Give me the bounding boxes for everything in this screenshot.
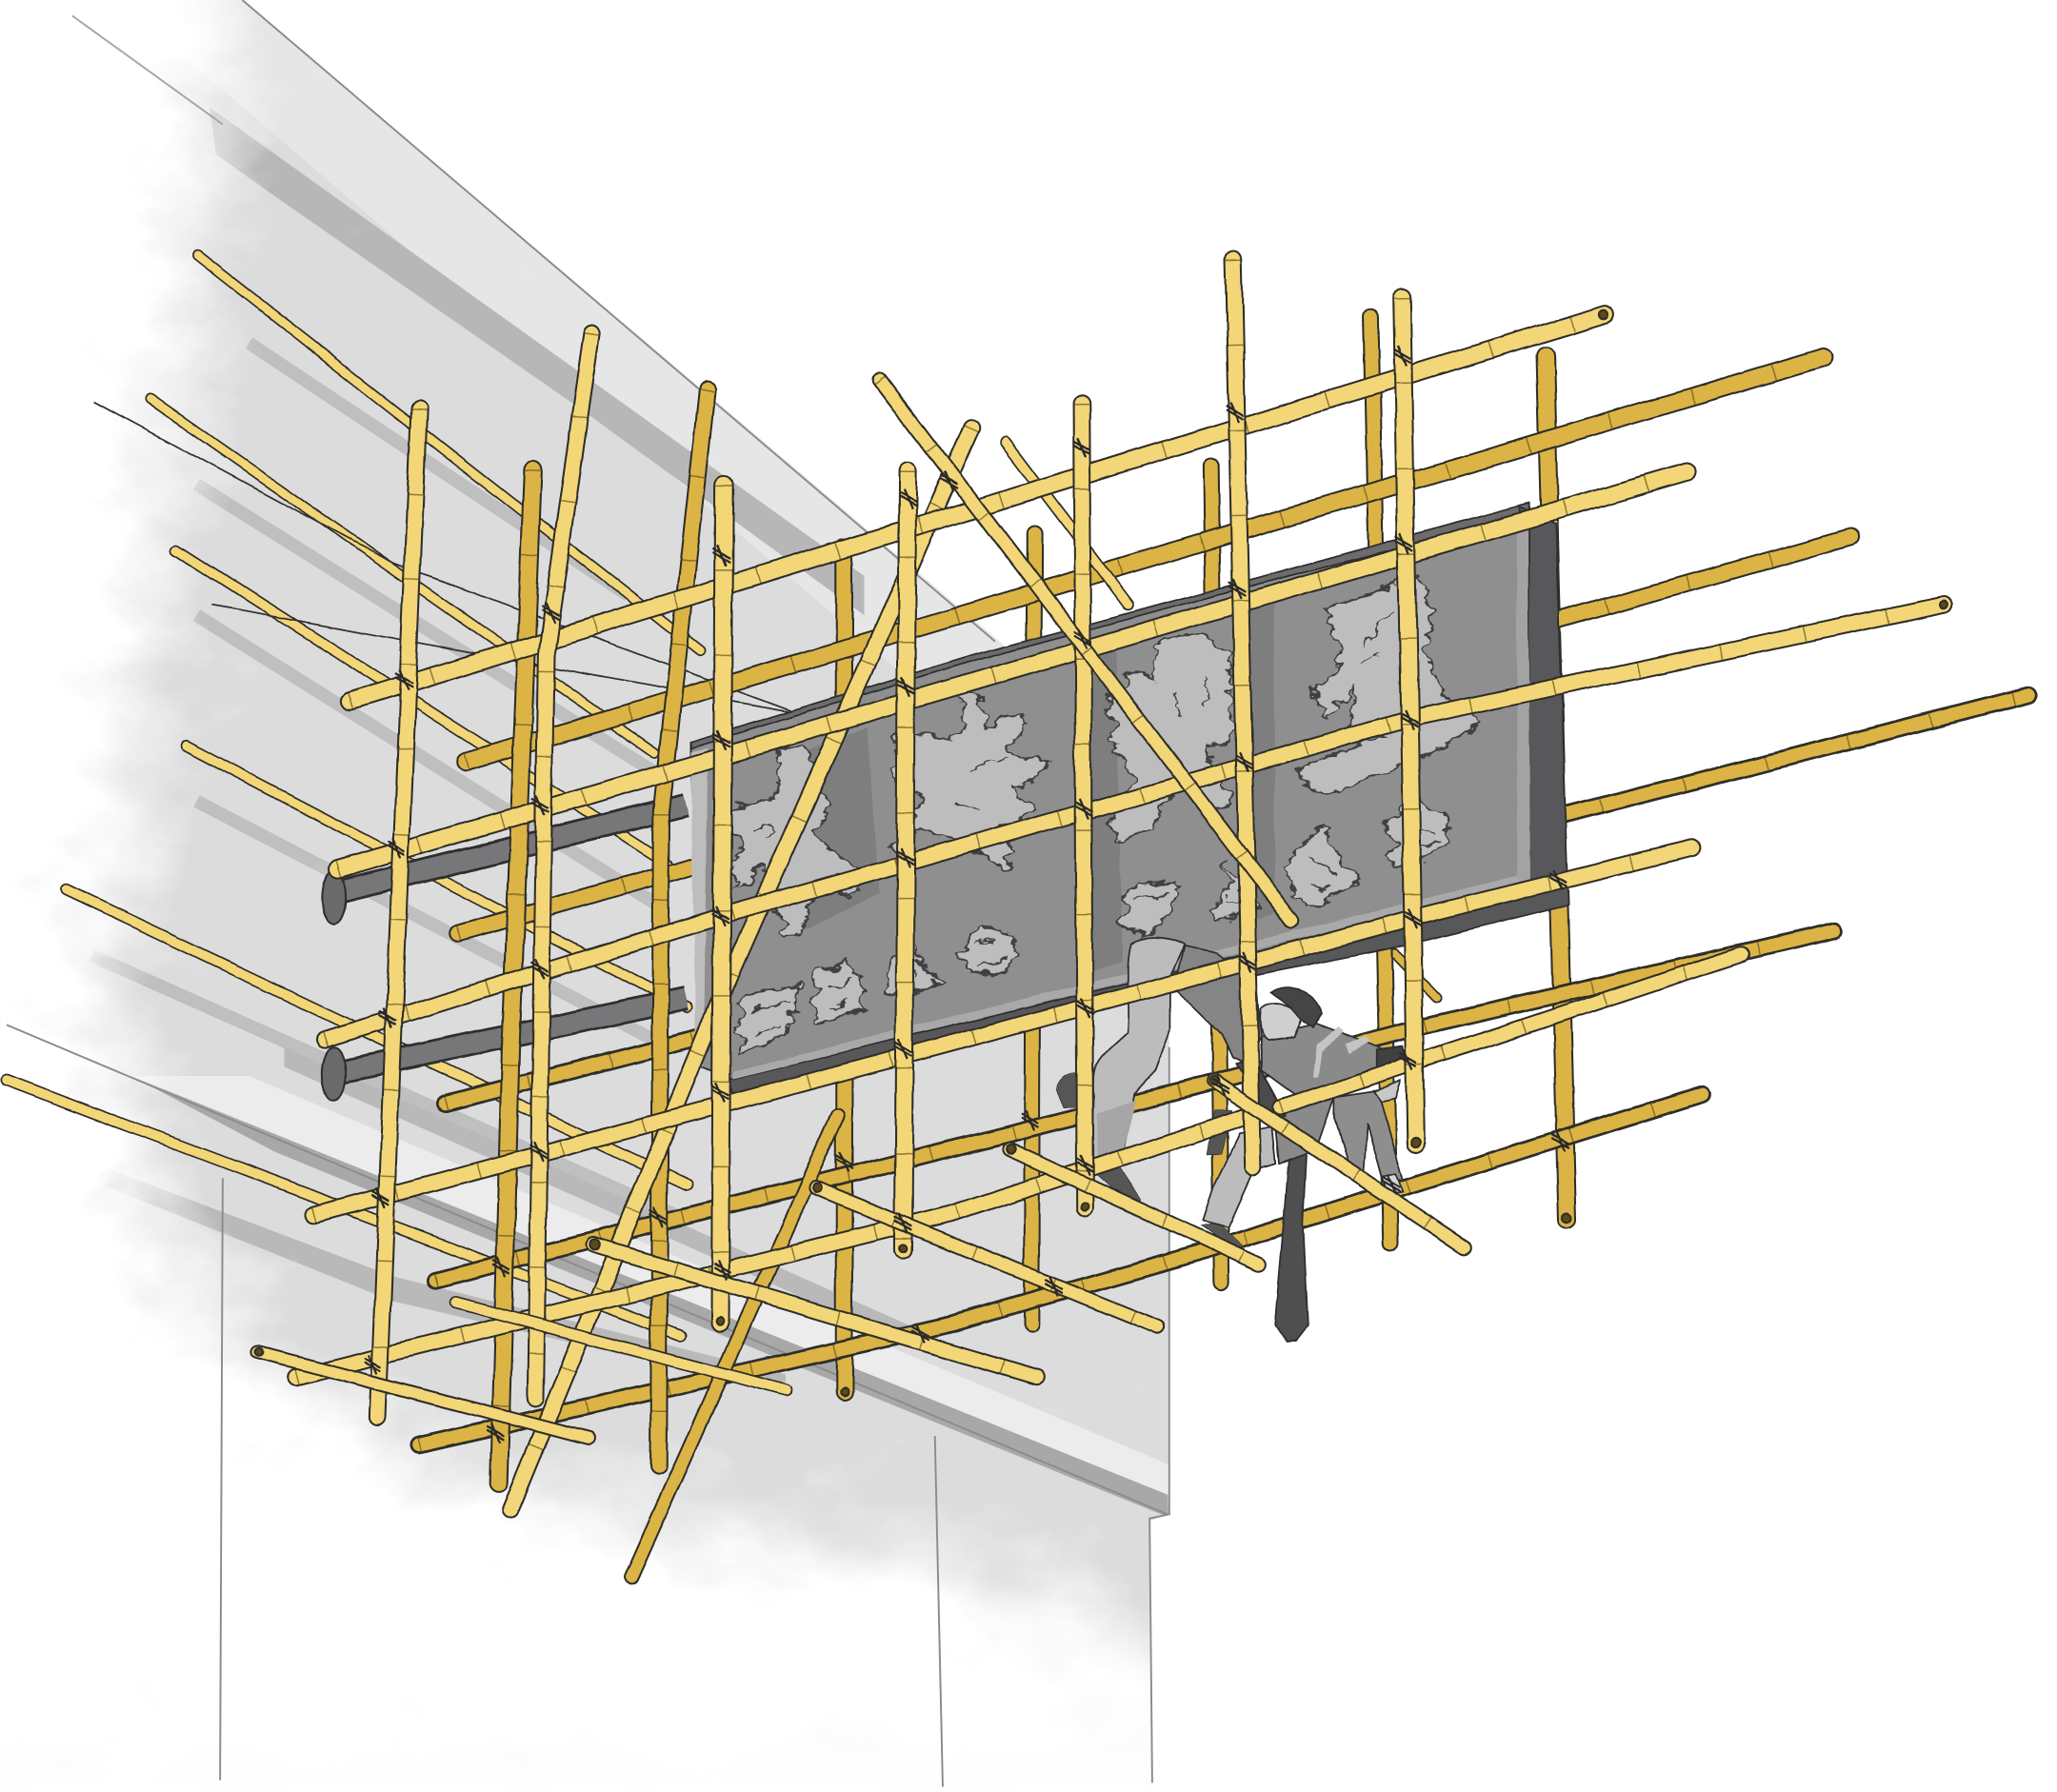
sign top edge (690, 503, 1529, 755)
large sign character 1 (715, 748, 867, 935)
back vertical bamboo poles (845, 317, 1568, 1391)
back horizontal bamboo poles (419, 357, 2029, 1578)
face (1261, 1005, 1301, 1041)
hand (1382, 1174, 1403, 1195)
upper beam shadow (210, 108, 864, 615)
front horizontal bamboo poles (296, 314, 1945, 1377)
front vertical bamboo poles (378, 259, 1417, 1418)
background wall with watercolor shading (63, 0, 1169, 1666)
reflective strips (1312, 1027, 1370, 1077)
large sign character 2 (889, 696, 1049, 869)
lower beam upper shadow (284, 1047, 916, 1348)
torso and thigh (1174, 946, 1261, 1064)
hanging shop sign (690, 503, 1568, 1097)
middle dark verticals (499, 390, 708, 1483)
sign face (690, 514, 1529, 1079)
thin back diagonal poles (7, 255, 1438, 1335)
lower beam edge shadow (131, 1076, 1168, 1517)
white watercolor fade (0, 0, 1149, 1746)
legs (1092, 938, 1185, 1164)
lower beam light band (131, 1076, 1169, 1505)
bamboo shadows on wall (91, 343, 681, 1217)
bamboo pole hollow ends (255, 309, 1948, 1395)
lower wall shadow band (109, 1175, 786, 1384)
small sign characters (736, 613, 1450, 1051)
large sign character 4 (1295, 574, 1487, 791)
hanging rope tail (1276, 1144, 1308, 1341)
glove (1236, 1059, 1285, 1122)
sign frame highlight (690, 747, 708, 1067)
worker hanging on the scaffold (1057, 938, 1407, 1341)
hair (1272, 988, 1321, 1027)
sign side and underside (728, 507, 1568, 1097)
large sign character 3 (1107, 631, 1231, 838)
rope ties at bamboo joints (366, 347, 1568, 1443)
upper beam light band (250, 8, 1005, 671)
bamboo scaffold and sign (7, 255, 2029, 1578)
second worker body (1334, 1090, 1403, 1181)
bottom white fade (0, 1741, 1149, 1792)
jacket (1261, 1024, 1407, 1164)
wall outlines (7, 0, 1169, 1787)
second worker head and hair (1378, 1047, 1407, 1070)
sign panel shading (1086, 637, 1122, 970)
steep light brace (510, 428, 971, 1509)
boots (1057, 1073, 1245, 1247)
front diagonal bamboo poles (258, 380, 1464, 1439)
dark support pipes (322, 805, 687, 1100)
sign lettering (715, 574, 1487, 1051)
